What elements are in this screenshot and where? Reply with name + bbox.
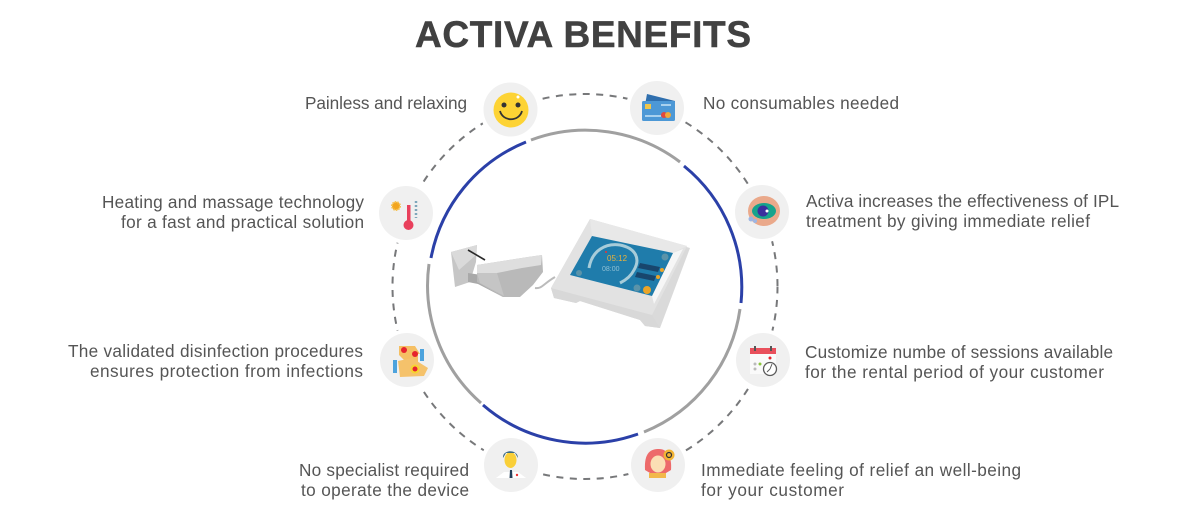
benefit: effectiveness (806, 191, 1119, 231)
icon: smiley (480, 78, 542, 140)
benefit: no specialist: No specialist required (299, 460, 469, 480)
icon: doctor (480, 434, 542, 496)
benefit: immediate relief (701, 460, 1021, 500)
benefit: disinfection: The validated disinfection procedures (68, 341, 363, 361)
benefit: immediate relief: Immediate feeling of relief an well-being (701, 460, 1021, 480)
icon: thermometer (375, 182, 437, 244)
icon: calendar and clock (732, 329, 794, 391)
console body (551, 219, 690, 328)
connecting cable (535, 277, 555, 288)
mask goggles (451, 245, 543, 297)
benefit: no consumables: No consumables needed (703, 93, 899, 113)
benefit: heating: for a fast and practical solution (121, 212, 364, 232)
benefit: heating: Heating and massage technology (102, 192, 364, 212)
benefit: effectiveness: treatment by giving immediate relief (806, 211, 1090, 231)
device illustration (451, 219, 690, 328)
inner ring (428, 130, 742, 443)
icon: eye (731, 181, 793, 243)
benefit: immediate relief: for your customer (701, 480, 844, 500)
benefit: disinfection: ensures protection from infections (90, 361, 363, 381)
outer dashed ring (392, 94, 778, 479)
benefit: effectiveness: Activa increases the effectiveness of IPL (806, 191, 1119, 211)
console screen: 08:00 (602, 266, 620, 273)
benefit: sessions (805, 342, 1113, 382)
console screen: 05:12 (607, 254, 628, 263)
benefit: painless: Painless and relaxing (305, 93, 467, 113)
benefit: sessions: for the rental period of your customer (805, 362, 1104, 382)
benefit: sessions: Customize numbe of sessions available (805, 342, 1113, 362)
console screen (570, 236, 673, 296)
title: ACTIVA BENEFITS (415, 14, 751, 55)
benefit: disinfection (68, 341, 363, 381)
icon: hands (376, 329, 438, 391)
benefit: no specialist: to operate the device (301, 480, 469, 500)
benefit: no specialist (299, 460, 469, 500)
icon: credit card (626, 77, 688, 139)
icon: woman (627, 434, 689, 496)
benefit: heating (102, 192, 364, 232)
